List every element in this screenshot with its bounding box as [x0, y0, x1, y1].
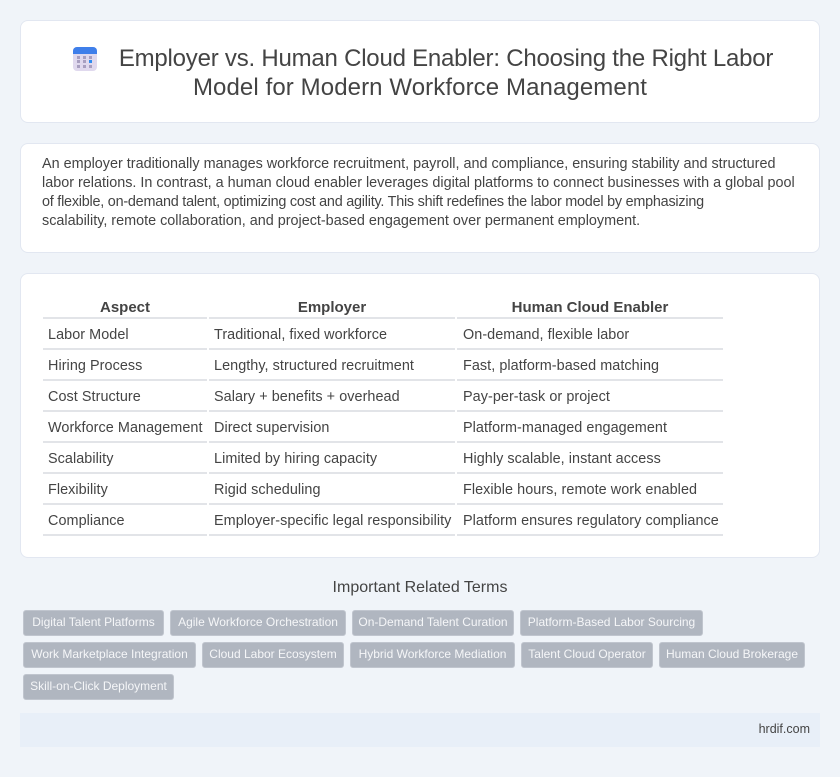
row: Workforce Management: Platform-managed engagement — [463, 420, 667, 436]
row: Workforce Management: Workforce Management — [48, 420, 203, 436]
tag: Human Cloud Brokerage — [666, 647, 798, 661]
text block: introduction: labor relations. In contrast, a human cloud enabler leverages digital platforms to connect businesses with a global pool — [42, 175, 795, 191]
heading: related terms: Important Related Terms — [333, 579, 507, 596]
row: Compliance — [43, 503, 723, 536]
panel: comparison table — [20, 273, 820, 558]
row: Hiring Process — [43, 348, 723, 374]
footer — [20, 713, 820, 747]
tag: Cloud Labor Ecosystem — [209, 647, 337, 661]
text block: introduction: scalability, remote collaboration, and project-based engagement over permanent employment. — [42, 213, 640, 229]
tag — [170, 610, 346, 636]
tag: Hybrid Workforce Mediation — [359, 647, 506, 661]
tag: Digital Talent Platforms — [32, 615, 155, 629]
row: Flexibility: Rigid scheduling — [214, 482, 321, 498]
row: Hiring Process: Fast, platform-based matching — [463, 358, 659, 374]
tag — [23, 642, 196, 668]
row: Scalability: Highly scalable, instant access — [463, 451, 661, 467]
tag: Agile Workforce Orchestration — [178, 615, 338, 629]
row: Hiring Process: Lengthy, structured recruitment — [214, 358, 414, 374]
row: Compliance: Compliance — [48, 513, 125, 529]
row: Workforce Management — [43, 410, 723, 436]
text block: introduction: of flexible, on-demand talent, optimizing cost and agility. This shift redefines the labor model by emphasizing — [42, 194, 704, 210]
row: Cost Structure: Cost Structure — [48, 389, 141, 405]
row: Cost Structure — [43, 379, 723, 405]
tag: Talent Cloud Operator — [528, 647, 646, 661]
row: Hiring Process: Hiring Process — [48, 358, 142, 374]
text block: introduction: An employer traditionally manages workforce recruitment, payroll, and compliance, ensuring stability and structured — [42, 156, 775, 172]
tag — [202, 642, 344, 668]
text block: introduction — [42, 156, 795, 229]
row: Labor Model: On-demand, flexible labor — [463, 327, 629, 343]
row: Compliance: Platform ensures regulatory compliance — [463, 513, 719, 529]
title: Model for Modern Workforce Management — [193, 74, 647, 101]
tag — [520, 610, 703, 636]
panel: header — [20, 20, 820, 123]
row: Scalability: Limited by hiring capacity — [214, 451, 377, 467]
tag — [350, 642, 515, 668]
icon: calendar — [73, 47, 97, 71]
tag — [659, 642, 805, 668]
row: Labor Model — [43, 317, 723, 343]
table headers: Human Cloud Enabler — [512, 299, 668, 316]
row: Workforce Management: Direct supervision — [214, 420, 329, 436]
table headers: Employer — [298, 299, 366, 316]
row: Compliance: Employer-specific legal responsibility — [214, 513, 451, 529]
tag — [23, 674, 174, 700]
row: Scalability — [43, 441, 723, 467]
row: Cost Structure: Salary + benefits + overhead — [214, 389, 400, 405]
title: Employer vs. Human Cloud Enabler: Choosing the Right Labor — [119, 45, 773, 72]
table headers — [100, 299, 668, 316]
table headers: Aspect — [100, 299, 150, 316]
footer source text: hrdif.com — [759, 722, 810, 736]
title — [119, 45, 773, 101]
tag — [23, 610, 164, 636]
row: Flexibility — [43, 472, 723, 498]
row: Labor Model: Labor Model — [48, 327, 129, 343]
row: Labor Model: Traditional, fixed workforce — [214, 327, 387, 343]
related term tags — [23, 610, 805, 700]
tag — [521, 642, 653, 668]
tag: Work Marketplace Integration — [31, 647, 188, 661]
panel: introduction — [20, 143, 820, 253]
tag: On-Demand Talent Curation — [358, 615, 508, 629]
row: Scalability: Scalability — [48, 451, 113, 467]
tag: Platform-Based Labor Sourcing — [528, 615, 695, 629]
tag: Skill-on-Click Deployment — [30, 679, 167, 693]
row: Cost Structure: Pay-per-task or project — [463, 389, 610, 405]
row: Flexibility: Flexible hours, remote work enabled — [463, 482, 697, 498]
tag — [352, 610, 514, 636]
row: Flexibility: Flexibility — [48, 482, 108, 498]
